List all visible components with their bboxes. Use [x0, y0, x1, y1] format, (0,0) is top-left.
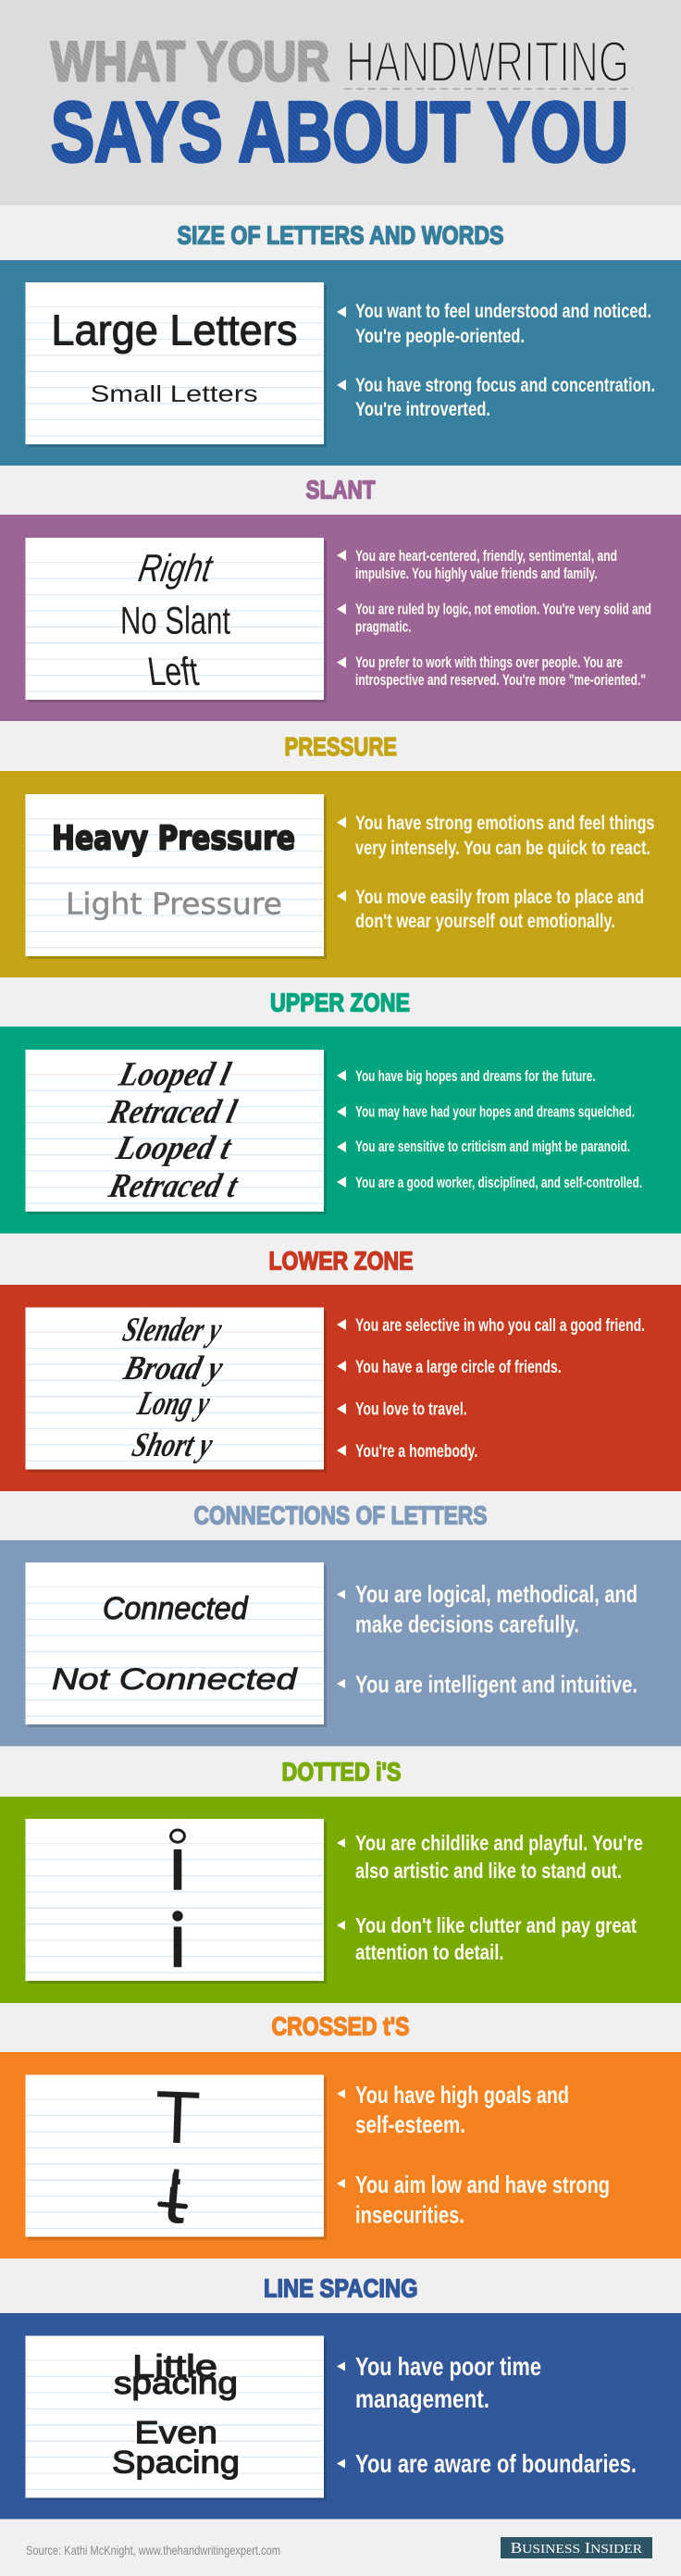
panel: lower zone	[0, 1285, 681, 1491]
bullet text: connections: make decisions carefully.	[355, 1611, 579, 1638]
logo: business insider	[501, 2537, 652, 2558]
bullet text: pressure: don't wear yourself out emotionally.	[355, 911, 615, 932]
card: line spacing samples	[26, 2336, 327, 2501]
bullet text: size	[337, 301, 655, 420]
bullet text: crossed t's: You aim low and have strong	[355, 2171, 610, 2198]
title: what your: WHAT YOUR	[51, 31, 329, 93]
bullet text: slant: pragmatic.	[355, 618, 412, 635]
heading: dotted i's: DOTTED i'S	[281, 1757, 402, 1786]
bullet text: pressure	[337, 813, 655, 932]
bullet text: slant	[337, 548, 651, 689]
panel: dotted i's	[0, 1797, 681, 2003]
bullet text: size: You're introverted.	[355, 399, 490, 420]
card: connection samples: Not Connected	[52, 1662, 298, 1696]
bullet text: line spacing	[337, 2352, 637, 2478]
bullet text: crossed t's: insecurities.	[355, 2201, 464, 2229]
bullet text: line spacing: You have poor time	[355, 2352, 541, 2381]
panel: upper zone	[0, 1027, 681, 1233]
heading: slant: SLANT	[305, 476, 376, 504]
header band with title	[0, 0, 681, 205]
bullet text: crossed t's: You have high goals and	[355, 2081, 569, 2109]
heading: lower zone: LOWER ZONE	[268, 1246, 413, 1276]
card: upper zone samples	[26, 1050, 327, 1214]
heading: upper zone: UPPER ZONE	[270, 989, 410, 1016]
card: line spacing samples: Little	[132, 2349, 217, 2384]
card: connection samples: Connected	[103, 1591, 249, 1626]
card: crossed t samples: t	[160, 2147, 191, 2241]
card: lower zone samples: Long y	[133, 1385, 214, 1423]
panel: size of letters	[0, 260, 681, 466]
heading: connections of letters: CONNECTIONS OF LETTERS	[194, 1501, 487, 1529]
card: upper zone samples: Looped l	[115, 1056, 235, 1093]
title: dashed underline	[344, 88, 634, 90]
card: pressure samples	[26, 794, 327, 959]
card: slant samples: Left	[145, 650, 201, 694]
card: line spacing samples: Even	[135, 2416, 217, 2451]
panel: pressure	[0, 771, 681, 977]
card: slant samples: Right	[135, 546, 217, 590]
card: line spacing samples: spacing	[114, 2366, 238, 2401]
card: line spacing samples: Spacing	[112, 2445, 240, 2481]
bullet text: crossed t's: self-esteem.	[355, 2110, 465, 2138]
bullet text: lower zone	[337, 1315, 645, 1462]
bullet text: dotted i's	[337, 1831, 643, 1964]
card: pressure samples: Light Pressure	[66, 887, 282, 922]
bullet text: lower zone: You love to travel.	[355, 1400, 467, 1420]
card: lower zone samples: Short y	[129, 1426, 217, 1464]
bullet text: size: You're people-oriented.	[355, 326, 525, 347]
heading: pressure: PRESSURE	[285, 732, 397, 761]
bullet text: line spacing: management.	[355, 2384, 489, 2413]
panel: crossed t's	[0, 2052, 681, 2259]
heading: crossed t's: CROSSED t'S	[272, 2012, 409, 2040]
card: size samples	[26, 282, 327, 447]
card: pressure samples: Heavy Pressure	[52, 820, 295, 858]
card: upper zone samples: Retraced l	[105, 1093, 241, 1131]
card: lower zone samples: Slender y	[119, 1312, 226, 1349]
card: crossed t samples: T	[154, 2075, 202, 2159]
bullet text: dotted i's: attention to detail.	[355, 1940, 504, 1964]
card: slant samples	[26, 538, 327, 703]
bullet text: lower zone: You're a homebody.	[355, 1441, 477, 1462]
card: connection samples	[26, 1562, 327, 1727]
card: size samples: Large Letters	[51, 306, 297, 355]
logo: business insider: BUSINESS INSIDER	[511, 2539, 643, 2557]
heading: size of letters and words: SIZE OF LETTERS AND WORDS	[178, 220, 503, 250]
card: crossed t samples	[26, 2075, 327, 2241]
card: lower zone samples	[26, 1307, 327, 1472]
card: dotted i samples: i	[169, 1823, 186, 1905]
panel: line spacing	[0, 2313, 681, 2520]
card: size samples: Small Letters	[91, 381, 258, 407]
card: slant samples: No Slant	[120, 599, 230, 642]
source credit: Source: Kathi McKnight, www.thehandwritingexpert.com	[26, 2543, 280, 2557]
panel: connections	[0, 1540, 681, 1746]
card: upper zone samples: Looped t	[112, 1129, 236, 1167]
card: dotted i samples: i	[169, 1900, 186, 1983]
heading: line spacing: LINE SPACING	[264, 2273, 418, 2303]
card: dotted i samples	[26, 1819, 327, 1984]
card: upper zone samples: Retraced t	[105, 1167, 242, 1205]
card: lower zone samples: Broad y	[119, 1350, 227, 1388]
panel: slant	[0, 515, 681, 721]
bullet text: lower zone: You have a large circle of friends.	[355, 1357, 562, 1377]
bullet text: connections	[337, 1580, 638, 1699]
bullet text: upper zone	[337, 1068, 642, 1191]
bullet text: crossed t's	[337, 2081, 610, 2229]
